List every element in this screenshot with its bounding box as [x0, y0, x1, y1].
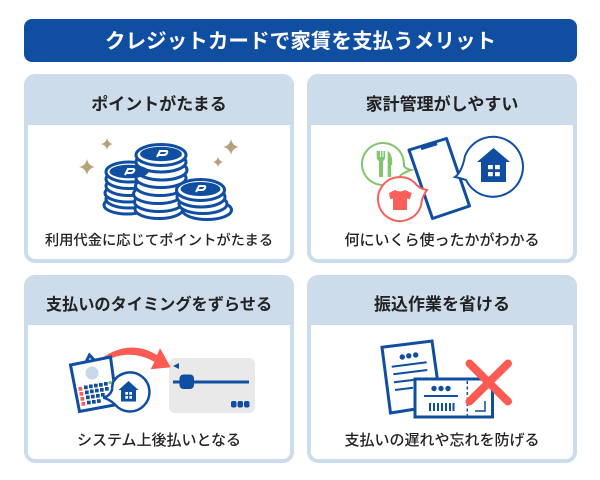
- centre stack: [135, 200, 183, 218]
- panel: points: [24, 74, 294, 263]
- icon: calendar, arrow and credit card: [70, 347, 255, 413]
- red arrow: [103, 347, 171, 369]
- caption: transfer: 支払いの遅れや忘れを防げる: [344, 432, 540, 449]
- icon: invoice, transfer slip and red cross: [382, 341, 508, 417]
- heading: budgeting: 家計管理がしやすい: [366, 95, 518, 114]
- heading: transfer: [311, 279, 573, 325]
- heading: points: ポイントがたまる: [91, 95, 227, 114]
- panel: save bank transfer: [307, 275, 577, 463]
- icon: smartphone with speech bubbles: [362, 137, 523, 221]
- left stack: [104, 196, 150, 214]
- credit card: [169, 358, 255, 413]
- smartphone: [409, 138, 470, 218]
- caption: timing: システム上後払いとなる: [77, 432, 241, 449]
- caption: points: 利用代金に応じてポイントがたまる: [45, 233, 273, 249]
- heading: transfer: 振込作業を省ける: [374, 295, 510, 314]
- title: [24, 19, 577, 62]
- heading: budgeting: [311, 78, 573, 125]
- title: クレジットカードで家賃を支払うメリット: [105, 30, 496, 53]
- heading: timing: 支払いのタイミングをずらせる: [46, 296, 272, 314]
- right stack: [182, 200, 232, 220]
- transfer slip: [415, 379, 492, 417]
- red bubble: [378, 177, 427, 221]
- heading: timing: [28, 279, 290, 325]
- green bubble: [362, 143, 411, 185]
- red cross: [470, 364, 508, 402]
- house bubble: [103, 372, 149, 411]
- panel: household budgeting: [307, 74, 577, 263]
- icon: coins and sparkles: [79, 138, 239, 220]
- caption: budgeting: 何にいくら使ったかがわかる: [344, 232, 540, 249]
- blue bubble: [455, 137, 523, 197]
- invoice: [382, 341, 441, 413]
- calendar: [86, 355, 95, 362]
- heading: points: [28, 78, 290, 125]
- panel: shift payment timing: [24, 275, 294, 463]
